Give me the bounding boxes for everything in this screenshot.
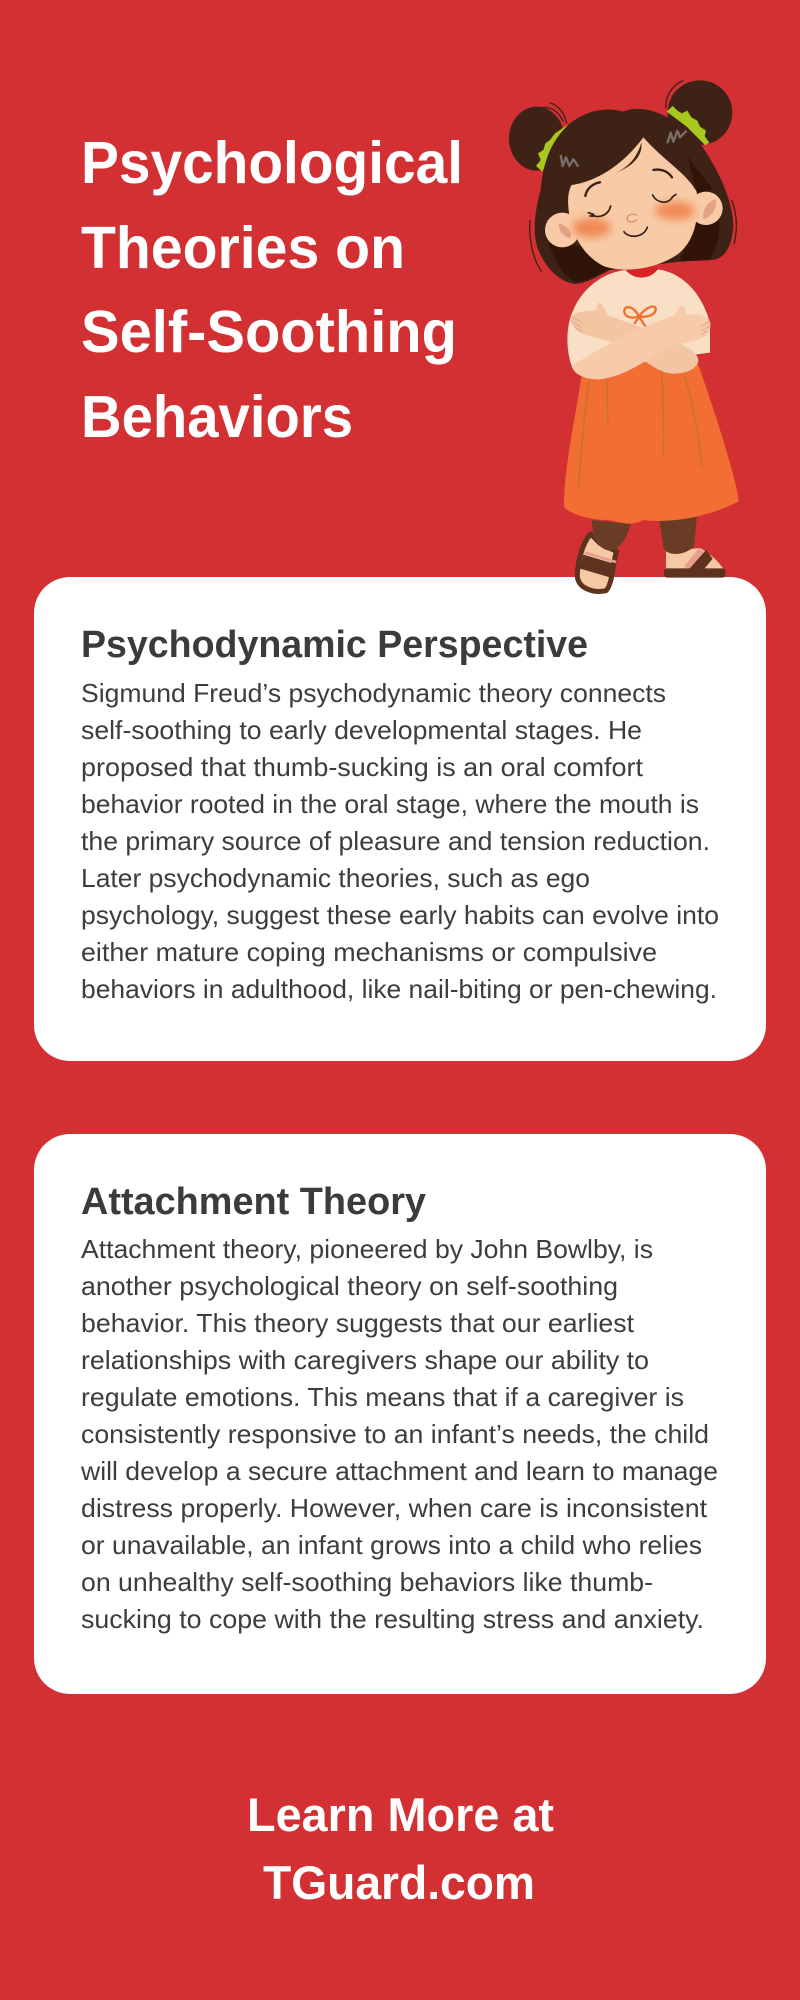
icon: legs (592, 517, 697, 554)
text block: psychodynamic body: the primary source of pleasure and tension reduction. (81, 826, 710, 856)
text block: psychodynamic body: behaviors in adulthood, like nail-biting or pen-chewing. (81, 974, 717, 1004)
text block: psychodynamic body: self-soothing to early developmental stages. He (81, 715, 642, 745)
text block: psychodynamic body: either mature coping mechanisms or compulsive (81, 937, 657, 967)
icon: left bun (509, 103, 567, 171)
text block: psychodynamic body: Sigmund Freud’s psychodynamic theory connects (81, 678, 666, 708)
icon: right sandal (664, 548, 726, 578)
title: Theories on (81, 215, 405, 281)
heading: attachment theory: Attachment Theory (81, 1181, 426, 1223)
text block: attachment body: sucking to cope with the resulting stress and anxiety. (81, 1604, 704, 1634)
text block: attachment body: consistently responsive to an infant’s needs, the child (81, 1419, 709, 1449)
text block: attachment body: distress properly. However, when care is inconsistent (81, 1493, 708, 1523)
icon: arm from left hand (571, 303, 698, 374)
text block: attachment body: another psychological theory on self-soothing (81, 1271, 618, 1301)
text block: attachment body (80, 1234, 718, 1634)
heading: psychodynamic perspective: Psychodynamic Perspective (81, 624, 588, 666)
text block: attachment body: relationships with caregivers shape our ability to (81, 1345, 649, 1375)
text block: psychodynamic body: Later psychodynamic theories, such as ego (81, 863, 590, 893)
footer call to action: TGuard.com (263, 1856, 535, 1909)
icon: face (568, 137, 697, 270)
icon: eyebrows, eyes, nose, mouth (585, 170, 676, 236)
text block: attachment body: or unavailable, an infant grows into a child who relies (81, 1530, 702, 1560)
icon: collar (626, 260, 658, 278)
icon: right bun (666, 80, 732, 145)
hair and buns (509, 80, 736, 284)
footer call to action: Learn More at (247, 1788, 554, 1841)
panel: psychodynamic perspective (34, 577, 766, 1061)
head (545, 137, 723, 270)
illustration: girl hugging herself (509, 80, 739, 591)
text block: psychodynamic body (81, 678, 719, 1004)
text block: psychodynamic body: psychology, suggest these early habits can evolve into (81, 900, 719, 930)
icon: dress (564, 360, 739, 524)
title (81, 130, 463, 450)
icon: shirt (567, 269, 710, 366)
icon: hair silhouette (530, 109, 736, 284)
icon: arm from right hand (572, 305, 710, 379)
text block: psychodynamic body: behavior rooted in the oral stage, where the mouth is (81, 789, 699, 819)
text block: attachment body: on unhealthy self-soothing behaviors like thumb- (81, 1567, 653, 1597)
text block: attachment body: will develop a secure attachment and learn to manage (80, 1456, 718, 1486)
panel: attachment theory (34, 1134, 766, 1694)
torso with crossed arms (567, 260, 710, 379)
footer call to action (247, 1788, 554, 1909)
text block: attachment body: regulate emotions. This means that if a caregiver is (81, 1382, 684, 1412)
title: Self-Soothing (81, 299, 457, 365)
text block: attachment body: Attachment theory, pioneered by John Bowlby, is (81, 1234, 653, 1264)
icon: left sandal (577, 534, 617, 591)
text block: attachment body: behavior. This theory suggests that our earliest (81, 1308, 635, 1338)
dress and legs (564, 360, 739, 591)
title: Psychological (81, 130, 463, 196)
icon: bow (624, 307, 656, 328)
title: Behaviors (81, 384, 353, 450)
icon: ears (545, 192, 723, 247)
text block: psychodynamic body: proposed that thumb-sucking is an oral comfort (81, 752, 644, 782)
